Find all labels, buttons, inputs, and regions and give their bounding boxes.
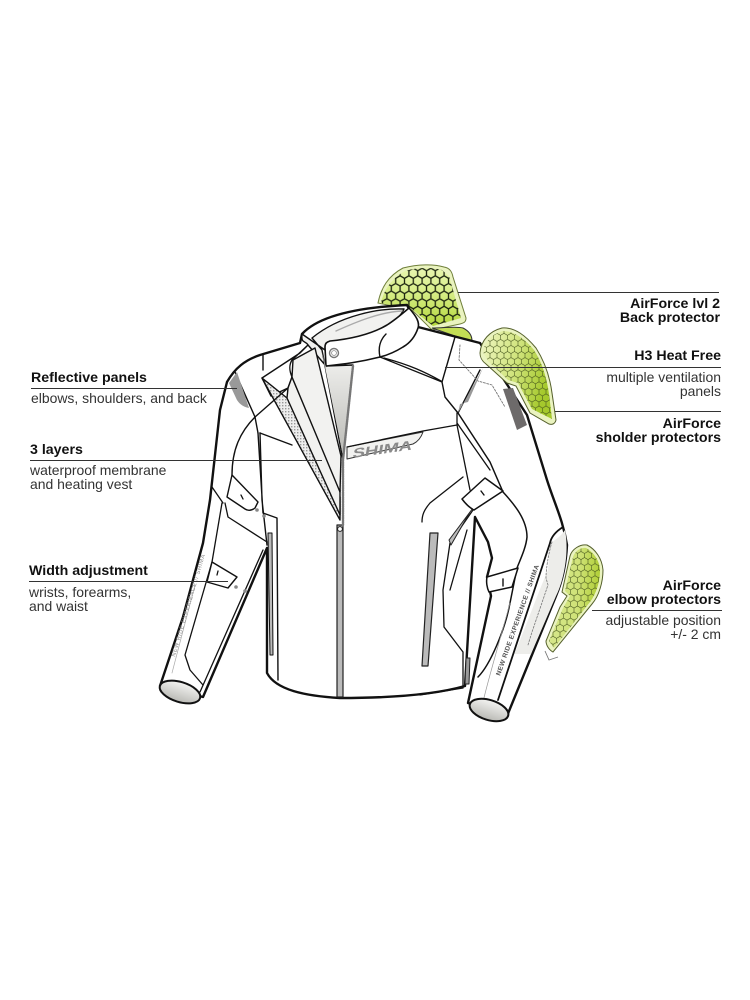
label: reflective panels [31,370,237,406]
right pocket zip [422,533,438,666]
protector: back [378,265,472,341]
label: width adjustment: Width adjustment [29,563,148,579]
label: reflective panels: Reflective panels [31,370,147,386]
label: elbow protectors: +/- 2 cm [670,626,721,642]
jacket silhouette [160,305,567,716]
label: width adjustment [28,563,228,614]
front zipper [337,366,353,697]
left cuff [157,676,203,708]
label: H3 heat free: panels [680,383,721,399]
chest logo panel [347,425,457,461]
label: shoulder protectors: sholder protectors [596,430,721,446]
label: elbow protectors: elbow protectors [607,592,721,608]
label: back protector [458,292,720,326]
right sleeve text: NEW RIDE EXPERIENCE // SHIMA [495,564,541,677]
label: elbow protectors: adjustable position [606,612,721,628]
left forearm tab [207,562,247,593]
chest and side seams [380,357,490,695]
label: H3 heat free: multiple ventilation [606,369,721,385]
inner collar shading [322,352,353,456]
protector: elbow [545,545,603,660]
label: shoulder protectors [555,412,721,446]
protector: shoulder [480,328,556,424]
label: elbow protectors [592,578,722,642]
label: 3 layers [29,442,322,492]
right side zip [465,658,470,684]
label: back protector: AirForce lvl 2 [630,296,720,312]
label: reflective panels: elbows, shoulders, and back [31,390,207,406]
label: H3 heat free: H3 Heat Free [634,348,721,364]
right forearm tab [487,568,518,592]
right sleeve [458,413,567,702]
right cuff [467,695,511,725]
label: width adjustment: and waist [29,598,88,614]
label: back protector: Back protector [620,310,720,326]
right shoulder panel [442,337,527,430]
right side gray strip [449,508,473,545]
label: 3 layers: waterproof membrane [29,462,167,478]
label: H3 heat free [445,348,721,399]
label: 3 layers: and heating vest [30,476,132,492]
left upper arm tab [227,475,266,518]
chest logo panel: SHIMA [351,437,414,461]
jacket [157,305,567,725]
right upper arm tab [462,478,503,510]
left shoulder details [229,355,278,680]
collar [302,308,419,460]
left sleeve text: NEW RIDE EXPERIENCE // SHIMA [171,554,207,658]
lapel left [255,345,341,520]
label: shoulder protectors: AirForce [663,416,721,432]
left sleeve seams [172,487,273,692]
label: 3 layers: 3 layers [30,442,83,458]
label: width adjustment: wrists, forearms, [28,584,131,600]
label: elbow protectors: AirForce [663,578,721,594]
